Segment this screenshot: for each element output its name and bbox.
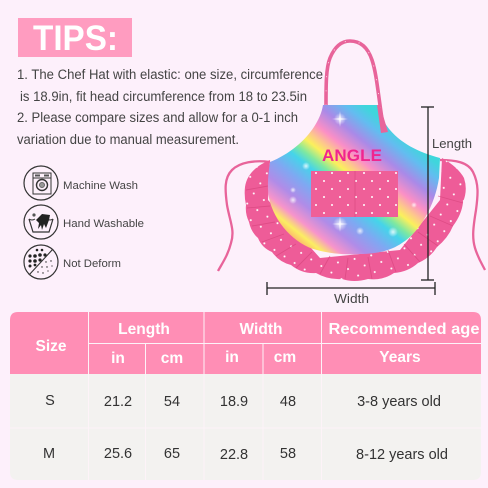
pocket (311, 171, 398, 217)
grid lines (10, 312, 481, 480)
row M: 65 (164, 446, 180, 462)
text block: tips: 1. The Chef Hat with elastic: one size, circumference (17, 67, 323, 82)
label: width: Width (334, 291, 369, 306)
title: TIPS: TIPS: (33, 19, 118, 58)
text block: tips: variation due to manual measurement. (17, 132, 239, 147)
icon: not deform (24, 245, 58, 279)
row S: 3-8 years old (357, 394, 441, 410)
neck strap (326, 41, 384, 132)
row M: 22.8 (220, 447, 248, 463)
row M (43, 446, 448, 463)
right tie (440, 160, 485, 270)
size table (10, 312, 481, 480)
header labels (35, 321, 480, 367)
row S: 18.9 (220, 394, 248, 410)
left tie (218, 161, 270, 271)
row S: 21.2 (104, 394, 132, 410)
header labels: Width (240, 321, 282, 338)
illustration: rainbow apron (218, 41, 485, 281)
row S (45, 393, 441, 410)
name: ANGLE: ANGLE (322, 146, 382, 165)
right strap end (377, 105, 388, 133)
row M: 8-12 years old (356, 447, 448, 463)
text block: tips: 2. Please compare sizes and allow for a 0-1 inch (17, 110, 298, 125)
header labels: Length (118, 321, 170, 338)
label: machine wash: Machine Wash (63, 180, 138, 192)
sparkles (289, 111, 417, 237)
row S: 54 (164, 394, 180, 410)
ruffle (245, 158, 466, 281)
arrow: width dimension (267, 282, 435, 295)
header labels: cm (161, 350, 183, 367)
row M: 58 (280, 446, 296, 462)
header labels: in (225, 349, 239, 366)
text block: tips: is 18.9in, fit head circumference from 18 to 23.5in (20, 89, 307, 104)
table header (10, 312, 481, 374)
icon: hand washable (24, 205, 58, 239)
header labels: Size (35, 338, 67, 355)
arrow: length dimension (421, 107, 434, 280)
icon: machine wash (24, 166, 58, 200)
label: length: Length (432, 136, 472, 151)
table body (10, 374, 481, 480)
row M: 25.6 (104, 446, 132, 462)
label: not deform: Not Deform (63, 258, 121, 270)
header labels: Recommended age (328, 321, 480, 338)
row S: S (45, 393, 55, 409)
ruffle folds (246, 186, 463, 279)
text block: tips (17, 67, 323, 147)
row S: 48 (280, 394, 296, 410)
apron body (268, 105, 440, 254)
row M: M (43, 446, 55, 462)
header labels: cm (274, 349, 296, 366)
label: hand washable: Hand Washable (63, 218, 144, 230)
header labels: in (111, 350, 125, 367)
header labels: Years (379, 349, 421, 366)
